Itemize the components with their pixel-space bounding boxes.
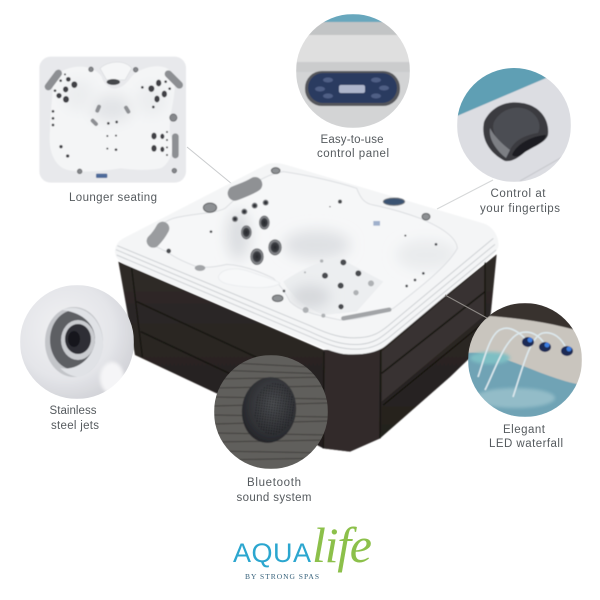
- diverter valves: [195, 168, 430, 302]
- label: easy-to-use control panel: [317, 134, 389, 160]
- panel: bluetooth speaker closeup: [214, 355, 328, 469]
- valves: [77, 67, 177, 174]
- logo: AquaLife by Strong Spas: AQUA: [233, 538, 311, 568]
- hot tub, three-quarter view: [115, 163, 498, 452]
- label: stainless steel jets: Stainless: [50, 405, 97, 417]
- panel: lounger seating top view: [39, 57, 186, 183]
- water arcs: [478, 328, 567, 397]
- logo mark in basin: [373, 221, 380, 226]
- panel: LED waterfall closeup: [468, 303, 582, 417]
- label: elegant LED waterfall: LED waterfall: [489, 438, 563, 450]
- steel jet: [45, 307, 103, 377]
- keypad: [305, 71, 400, 106]
- seat jets: [166, 200, 437, 309]
- head section: [100, 62, 132, 80]
- rim ridges: [116, 238, 496, 349]
- panel: control panel closeup: [296, 14, 410, 128]
- jets: [52, 73, 171, 158]
- headrest pillow: front: [343, 310, 389, 318]
- large jets: [232, 200, 282, 265]
- logo: AquaLife by Strong Spas: [233, 517, 372, 581]
- speaker dome: [242, 376, 296, 444]
- label: stainless steel jets: steel jets: [51, 420, 99, 432]
- headrest pillow: back: [235, 184, 255, 193]
- control panel on tub: [383, 198, 405, 205]
- footwell seat edge: [218, 269, 280, 288]
- small pale jets: [303, 259, 374, 318]
- connector line: control at your fingertips: [437, 180, 493, 209]
- acrylic rim: [115, 163, 498, 354]
- label: bluetooth sound system: sound system: [236, 492, 312, 504]
- air control knob: [483, 102, 548, 161]
- panel: stainless steel jet closeup: [20, 285, 134, 399]
- pillows: [48, 73, 179, 155]
- cabinet: [118, 254, 497, 452]
- label: control at your fingertips: [480, 188, 560, 215]
- label: bluetooth sound system: [236, 477, 312, 504]
- basin outline: [147, 172, 457, 320]
- top-view shell: [39, 57, 186, 183]
- basin: [226, 212, 446, 314]
- connector line: lounger seating: [187, 147, 232, 184]
- label: elegant LED waterfall: Elegant: [503, 424, 546, 436]
- panel: control at fingertips closeup: [457, 68, 571, 182]
- small control: [96, 174, 107, 178]
- label: stainless steel jets: [50, 405, 99, 432]
- label: bluetooth sound system: Bluetooth: [247, 477, 301, 489]
- label: control at your fingertips: Control at: [490, 188, 546, 200]
- label: control at your fingertips: your fingertips: [480, 203, 560, 215]
- connector line: LED waterfall: [445, 295, 487, 318]
- LED nozzles: [522, 337, 573, 356]
- logo: AquaLife by Strong Spas: life: [312, 517, 372, 573]
- label: elegant LED waterfall: [489, 424, 563, 450]
- logo: AquaLife by Strong Spas: BY STRONG SPAS: [245, 572, 319, 581]
- label: easy-to-use control panel: control panel: [317, 148, 389, 160]
- label: lounger seating: Lounger seating: [69, 192, 157, 204]
- headrest pillow: left: [153, 228, 163, 241]
- label: easy-to-use control panel: Easy-to-use: [320, 134, 384, 146]
